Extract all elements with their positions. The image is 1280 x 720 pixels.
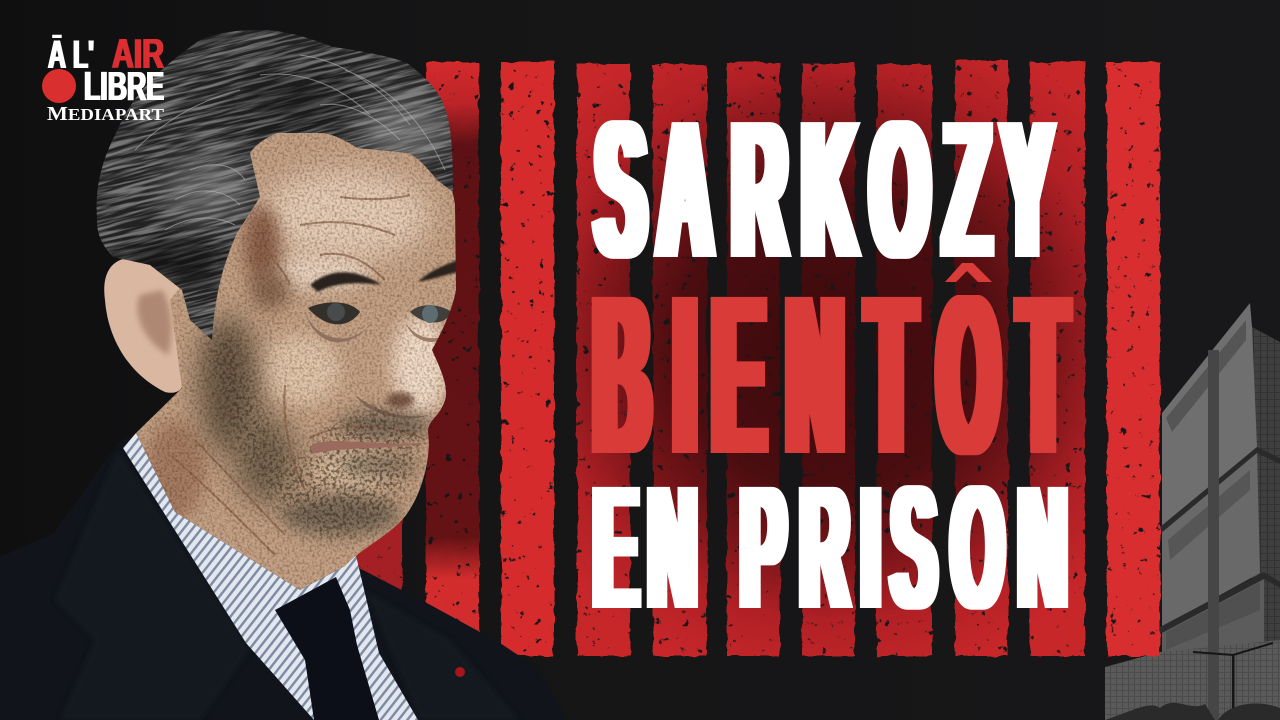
wrinkles — [170, 195, 425, 555]
tie — [275, 577, 379, 720]
face — [136, 133, 456, 590]
image: courthouse building — [1105, 303, 1280, 720]
skin highlights — [145, 170, 448, 520]
shirt with stripes — [123, 433, 418, 720]
logo text: À L': Ā L' — [48, 33, 94, 77]
heading: BIENTÔT: BIENTÔT — [594, 248, 1067, 501]
right eye — [405, 305, 455, 342]
portrait of Nicolas Sarkozy — [0, 30, 518, 720]
hair strands — [135, 55, 445, 230]
ear — [104, 258, 190, 393]
heading: SARKOZY: SARKOZY — [596, 81, 1052, 299]
mouth — [312, 441, 428, 454]
lapels — [55, 450, 520, 720]
left eye — [306, 302, 372, 342]
eyebrows — [310, 260, 458, 292]
skin shadows — [198, 205, 433, 535]
prison bars — [352, 60, 1160, 656]
nostril — [355, 395, 430, 418]
suit jacket — [0, 433, 565, 720]
logo text: AIR: AIR — [112, 30, 164, 77]
heading: EN PRISON: EN PRISON — [594, 449, 1067, 646]
logo: red circle — [42, 69, 76, 103]
logo text: Mediapart: MEDIAPART — [47, 103, 165, 125]
circumflex accent on BIENTÔT — [945, 263, 992, 282]
logo text: LIBRE: LIBRE — [84, 63, 164, 109]
logo: A l'air libre Mediapart — [42, 30, 165, 125]
skin texture — [136, 133, 456, 590]
stubble speckle — [205, 330, 425, 540]
lapel pin — [455, 667, 465, 677]
hair — [96, 30, 453, 340]
